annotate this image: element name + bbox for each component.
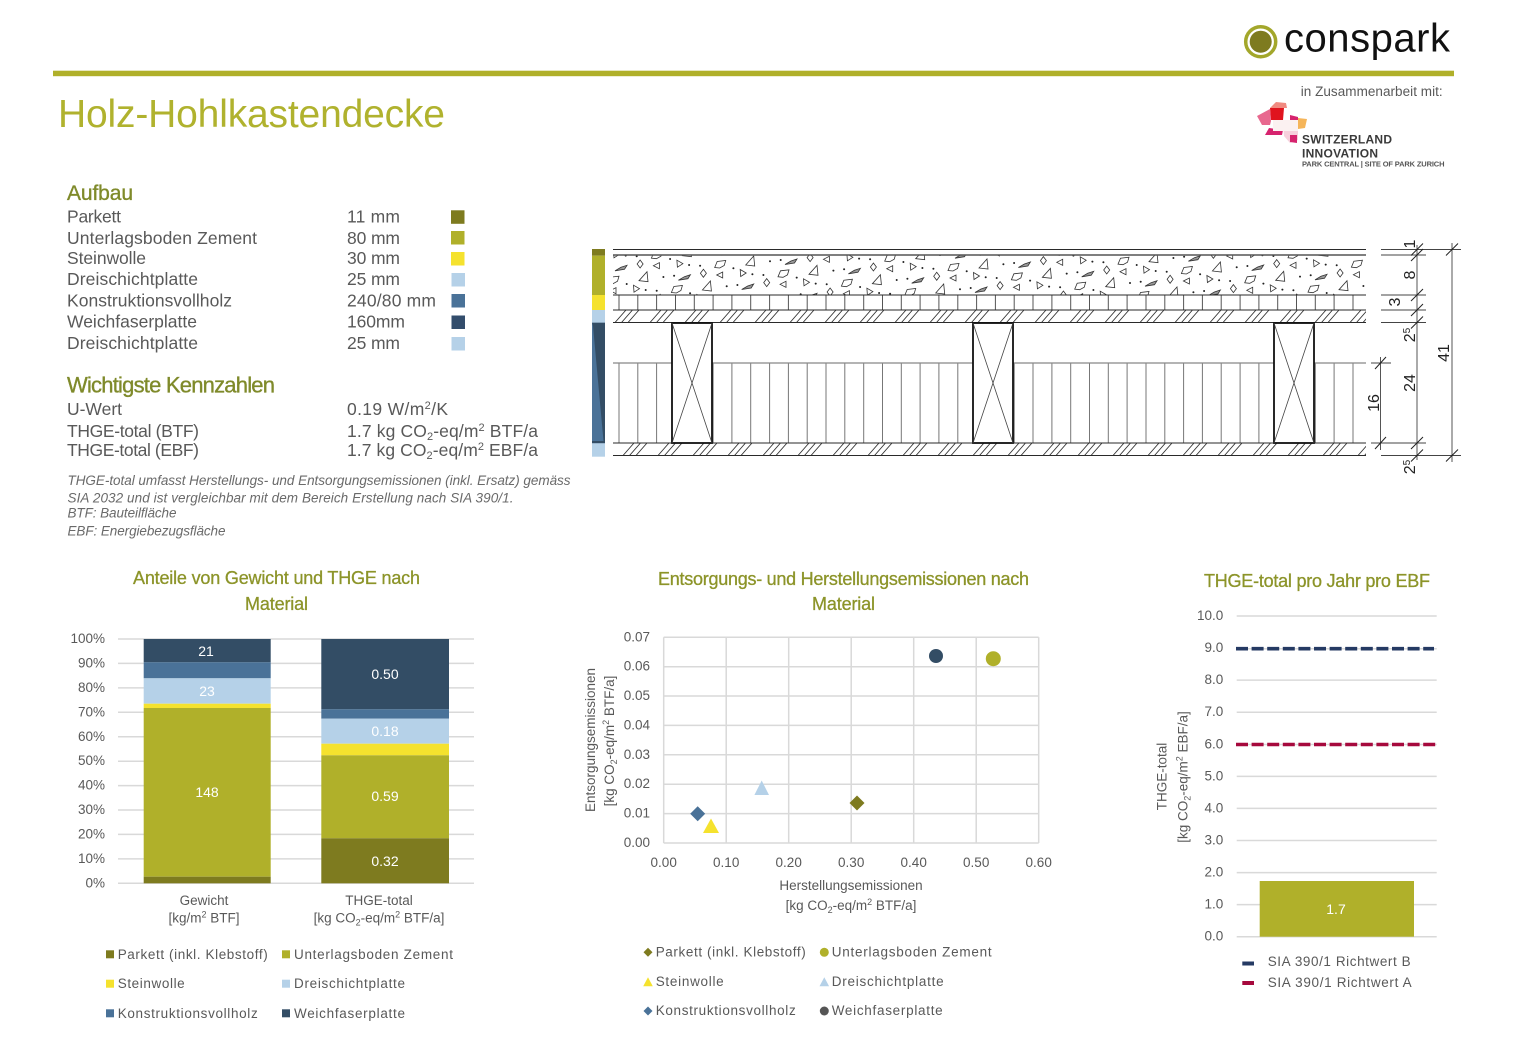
layer: Dreischichtplatte bbox=[67, 269, 465, 289]
layer: Konstruktionsvollholz bbox=[67, 291, 465, 311]
x axis labels: 0.50 bbox=[963, 855, 989, 870]
legend: Unterlagsboden Zement bbox=[294, 947, 453, 962]
x axis title: Herstellungsemissionen bbox=[779, 878, 923, 893]
layer: Steinwolle bbox=[67, 248, 464, 268]
y axis title: 2 bbox=[1175, 756, 1185, 761]
y axis labels: 80% bbox=[78, 680, 105, 695]
timber beam 3 bbox=[1274, 323, 1314, 443]
legend bbox=[1242, 954, 1412, 990]
y axis labels: 8.0 bbox=[1205, 672, 1223, 687]
y axis labels: 0.06 bbox=[624, 659, 650, 674]
bar: THGE-total: 0.59 bbox=[371, 788, 399, 804]
legend: Unterlagsboden Zement bbox=[832, 945, 992, 960]
chart title: Anteile von Gewicht und THGE nach bbox=[133, 568, 420, 588]
x axis labels: 0.30 bbox=[838, 855, 864, 870]
metric: THGE-total EBF: 1.7 kg CO bbox=[347, 440, 426, 460]
footnote: BTF: Bauteilfläche bbox=[68, 506, 176, 521]
metric: U-Wert: U-Wert bbox=[67, 399, 122, 419]
x axis labels: 2 bbox=[202, 910, 207, 920]
legend bbox=[643, 945, 992, 1018]
y axis labels: 40% bbox=[78, 778, 105, 793]
legend: Parkett (inkl. Klebstoff) bbox=[656, 945, 806, 960]
footnote: EBF: Energiebezugsfläche bbox=[68, 524, 226, 539]
metric: THGE-total BTF: 1.7 kg CO bbox=[347, 421, 427, 441]
metric: THGE-total BTF: THGE-total (BTF) bbox=[67, 421, 199, 441]
legend: Weichfaserplatte bbox=[294, 1006, 405, 1021]
y axis title: [kg CO bbox=[602, 764, 617, 806]
legend: Steinwolle bbox=[656, 974, 724, 989]
x axis labels: [kg/m bbox=[168, 911, 202, 926]
layer: Steinwolle: Steinwolle bbox=[67, 248, 146, 268]
y axis labels bbox=[624, 629, 650, 850]
y axis labels: 0.0 bbox=[1205, 929, 1223, 944]
x axis labels: THGE-total bbox=[345, 893, 413, 908]
panel: Aufbau bbox=[67, 182, 465, 353]
chart title: THGE-total pro Jahr pro EBF bbox=[1204, 571, 1430, 591]
gridlines bbox=[118, 639, 474, 883]
layer: Konstruktionsvollholz: Konstruktionsvollholz bbox=[67, 291, 232, 311]
x axis labels: 0.20 bbox=[776, 855, 802, 870]
y axis labels: 20% bbox=[78, 826, 105, 842]
legend: Steinwolle bbox=[118, 976, 185, 991]
y axis labels: 90% bbox=[78, 656, 105, 670]
y axis title: 2 bbox=[1183, 796, 1193, 801]
grid bbox=[664, 637, 1039, 843]
insulation lower bbox=[619, 363, 1353, 443]
layer: Konstruktionsvollholz: 240/80 mm bbox=[347, 291, 436, 311]
x axis labels: 0.10 bbox=[713, 855, 739, 870]
dimension labels: 2 bbox=[1402, 465, 1419, 474]
y axis labels: 0.02 bbox=[624, 776, 650, 791]
x axis title: 2 bbox=[867, 897, 872, 907]
panel: Wichtigste Kennzahlen bbox=[67, 373, 538, 462]
dimension labels: 5 bbox=[1402, 459, 1413, 465]
metric: THGE-total BTF: -eq/m bbox=[433, 421, 478, 441]
y axis labels: 0% bbox=[85, 876, 105, 890]
y axis title bbox=[1155, 711, 1193, 843]
chart title bbox=[133, 568, 420, 614]
metric: THGE-total EBF: -eq/m bbox=[433, 440, 478, 460]
data points bbox=[690, 649, 1001, 833]
x axis labels: BTF/a] bbox=[400, 911, 444, 926]
x axis labels: 0.40 bbox=[901, 855, 927, 870]
metric: THGE-total BTF: 2 bbox=[479, 422, 485, 434]
metric: U-Wert: 0.19 W/m bbox=[347, 399, 424, 419]
layer: Dreischichtplatte: 25 mm bbox=[347, 269, 400, 289]
x axis title bbox=[779, 878, 923, 915]
legend: Konstruktionsvollholz bbox=[656, 1003, 796, 1018]
lower board hatch bbox=[613, 443, 1366, 456]
x axis labels bbox=[168, 893, 444, 928]
y axis labels: 9.0 bbox=[1205, 640, 1223, 655]
logo: Switzerland Innovation: PARK CENTRAL | SITE OF PARK ZURICH bbox=[1302, 160, 1444, 169]
header rule bbox=[53, 71, 1454, 76]
chart title: Entsorgungs- und Herstellungsemissionen nach bbox=[658, 569, 1029, 589]
timber beam 1 bbox=[672, 323, 712, 443]
y axis labels: 2.0 bbox=[1205, 865, 1223, 880]
layer: Dreischichtplatte: 25 mm bbox=[347, 333, 400, 353]
y axis labels: 50% bbox=[78, 753, 105, 768]
legend: SIA 390/1 Richtwert A bbox=[1268, 975, 1412, 990]
layer: Dreischichtplatte: Dreischichtplatte bbox=[67, 269, 198, 289]
footnote: THGE-total umfasst Herstellungs- und Entsorgungsemissionen (inkl. Ersatz) gemäss bbox=[68, 473, 571, 488]
y axis labels: 100% bbox=[70, 631, 105, 646]
y axis title: -eq/m bbox=[602, 725, 617, 759]
y axis labels: 0.03 bbox=[624, 747, 650, 762]
legend: Konstruktionsvollholz bbox=[118, 1006, 258, 1021]
y axis title: THGE-total bbox=[1155, 743, 1170, 810]
bar: THGE-total: 0.32 bbox=[371, 853, 399, 869]
metric: THGE-total BTF bbox=[67, 421, 538, 443]
bar: Gewicht: 21 bbox=[198, 643, 214, 659]
panel: THGE-total bar chart bbox=[1155, 571, 1437, 990]
y axis labels: 4.0 bbox=[1205, 800, 1223, 815]
y axis labels: 3.0 bbox=[1205, 832, 1223, 848]
bar: THGE-total: 0.18 bbox=[371, 723, 399, 739]
layer: Parkett: 11 mm bbox=[347, 207, 400, 227]
x axis title: BTF/a] bbox=[872, 898, 916, 913]
y axis title: Entsorgungsemissionen bbox=[583, 668, 598, 812]
y axis title: EBF/a] bbox=[1176, 711, 1191, 756]
insulation upper bbox=[619, 295, 1353, 310]
layer: Weichfaserplatte: Weichfaserplatte bbox=[67, 312, 197, 332]
y axis labels: 5.0 bbox=[1205, 768, 1223, 783]
y axis labels bbox=[1197, 608, 1223, 944]
layer: Weichfaserplatte: 160mm bbox=[347, 312, 405, 332]
dimension labels: 3 bbox=[1387, 297, 1404, 306]
y axis labels: 30% bbox=[78, 802, 105, 817]
y axis labels: 10% bbox=[78, 851, 105, 866]
metric: THGE-total EBF: 2 bbox=[478, 441, 484, 453]
x axis title: 2 bbox=[828, 905, 833, 915]
bar: Gewicht bbox=[144, 639, 271, 883]
y axis labels: 60% bbox=[78, 729, 105, 744]
metric: THGE-total EBF: 2 bbox=[427, 450, 433, 462]
metric: U-Wert bbox=[67, 399, 448, 419]
y axis title: [kg CO bbox=[1176, 801, 1191, 843]
legend bbox=[106, 947, 453, 1021]
layer: Unterlagsboden Zement: Unterlagsboden Zement bbox=[67, 228, 257, 248]
layer colour strip bbox=[592, 249, 605, 457]
logo: Switzerland Innovation: INNOVATION bbox=[1302, 146, 1378, 160]
logo: conspark: conspark bbox=[1284, 17, 1451, 61]
construction section drawing bbox=[613, 249, 1366, 456]
metric: THGE-total EBF bbox=[67, 440, 538, 462]
legend: SIA 390/1 Richtwert B bbox=[1268, 954, 1411, 969]
y axis labels: 70% bbox=[78, 704, 105, 719]
dimension lines bbox=[1366, 239, 1461, 474]
chart title bbox=[658, 569, 1029, 614]
dimension labels bbox=[1366, 239, 1453, 474]
x axis labels: -eq/m bbox=[361, 911, 395, 926]
x axis labels: BTF] bbox=[207, 911, 240, 926]
y axis labels bbox=[70, 631, 105, 890]
legend: Dreischichtplatte bbox=[832, 974, 944, 989]
partner note: in Zusammenarbeit mit: bbox=[1301, 84, 1443, 99]
y axis title bbox=[583, 668, 619, 812]
gridlines bbox=[1237, 616, 1437, 937]
bar: 1.7: 1.7 bbox=[1326, 901, 1346, 917]
layer: Steinwolle: 30 mm bbox=[347, 248, 400, 268]
y axis labels: 7.0 bbox=[1205, 704, 1223, 719]
y axis title: -eq/m bbox=[1176, 761, 1191, 796]
legend: Weichfaserplatte bbox=[832, 1003, 943, 1018]
chart title: Material bbox=[812, 594, 875, 614]
panel: stacked bar chart bbox=[70, 568, 474, 1021]
concrete screed aggregate bbox=[613, 256, 1364, 294]
y axis labels: 0.05 bbox=[624, 688, 650, 703]
bar: Gewicht: 148 bbox=[195, 784, 219, 800]
metric: THGE-total EBF: EBF/a bbox=[484, 440, 538, 460]
x axis title: [kg CO bbox=[786, 898, 828, 913]
panel: scatter chart bbox=[583, 569, 1052, 1018]
y axis labels: 0.04 bbox=[624, 717, 650, 732]
x axis labels: 0.60 bbox=[1026, 855, 1052, 870]
layer: Unterlagsboden Zement bbox=[67, 228, 464, 248]
y axis labels: 0.00 bbox=[624, 835, 650, 850]
y axis title: 2 bbox=[601, 720, 611, 725]
layer: Parkett: Parkett bbox=[67, 207, 121, 227]
layer: Weichfaserplatte bbox=[67, 312, 465, 332]
dimension labels: 16 bbox=[1366, 394, 1383, 412]
y axis labels: 0.07 bbox=[624, 629, 650, 644]
x axis labels: 2 bbox=[356, 918, 361, 928]
x axis title: -eq/m bbox=[833, 898, 867, 913]
target line: Richtwert B bbox=[1236, 647, 1434, 651]
upper board hatch bbox=[613, 310, 1366, 322]
legend: Dreischichtplatte bbox=[294, 976, 405, 991]
bar: 1.7 bbox=[1260, 881, 1414, 937]
chart title: Material bbox=[245, 594, 308, 614]
layer: Dreischichtplatte: Dreischichtplatte bbox=[67, 333, 198, 353]
x axis labels: 0.00 bbox=[651, 855, 677, 870]
logo: Switzerland Innovation bbox=[1257, 102, 1444, 169]
layer: Parkett bbox=[67, 207, 464, 227]
heading: Aufbau: Aufbau bbox=[67, 182, 133, 205]
footnote bbox=[68, 473, 571, 539]
x axis labels: 2 bbox=[395, 910, 400, 920]
section lines bbox=[613, 250, 1366, 456]
x axis labels: [kg CO bbox=[314, 911, 356, 926]
timber beam 2 bbox=[973, 323, 1013, 443]
bar: THGE-total: 0.50 bbox=[371, 666, 399, 682]
dimension labels: 24 bbox=[1402, 374, 1419, 392]
layer: Dreischichtplatte bbox=[67, 333, 465, 353]
legend: Parkett (inkl. Klebstoff) bbox=[118, 947, 268, 962]
dimension labels: 1 bbox=[1402, 239, 1419, 248]
y axis labels: 1.0 bbox=[1205, 897, 1223, 912]
y axis labels: 6.0 bbox=[1205, 736, 1223, 751]
metric: THGE-total BTF: BTF/a bbox=[485, 421, 538, 441]
dimension labels: 8 bbox=[1402, 270, 1419, 279]
dimension labels: 5 bbox=[1402, 327, 1413, 333]
x axis labels bbox=[651, 855, 1052, 870]
x axis labels: Gewicht bbox=[180, 893, 229, 908]
metric: U-Wert: 2 bbox=[425, 400, 431, 412]
heading: Wichtigste Kennzahlen: Wichtigste Kennzahlen bbox=[67, 373, 275, 398]
footnote: SIA 2032 und ist vergleichbar mit dem Bereich Erstellung nach SIA 390/1. bbox=[68, 491, 514, 506]
dimension labels: 2 bbox=[1402, 333, 1419, 342]
y axis labels: 0.01 bbox=[624, 806, 650, 821]
layer: Unterlagsboden Zement: 80 mm bbox=[347, 228, 400, 248]
metric: THGE-total EBF: THGE-total (EBF) bbox=[67, 440, 199, 460]
y axis title: 2 bbox=[609, 759, 619, 764]
title: Holz-Hohlkastendecke bbox=[58, 93, 445, 136]
y axis title: BTF/a] bbox=[602, 676, 617, 720]
y axis labels: 10.0 bbox=[1197, 608, 1223, 623]
dimension labels: 41 bbox=[1436, 344, 1453, 362]
metric: U-Wert: /K bbox=[431, 399, 448, 419]
logo: Switzerland Innovation: SWITZERLAND bbox=[1302, 132, 1392, 146]
bar: Gewicht: 23 bbox=[199, 683, 215, 699]
metric: THGE-total BTF: 2 bbox=[427, 431, 433, 443]
bar: THGE-total bbox=[321, 639, 449, 883]
target line: Richtwert A bbox=[1236, 743, 1436, 746]
